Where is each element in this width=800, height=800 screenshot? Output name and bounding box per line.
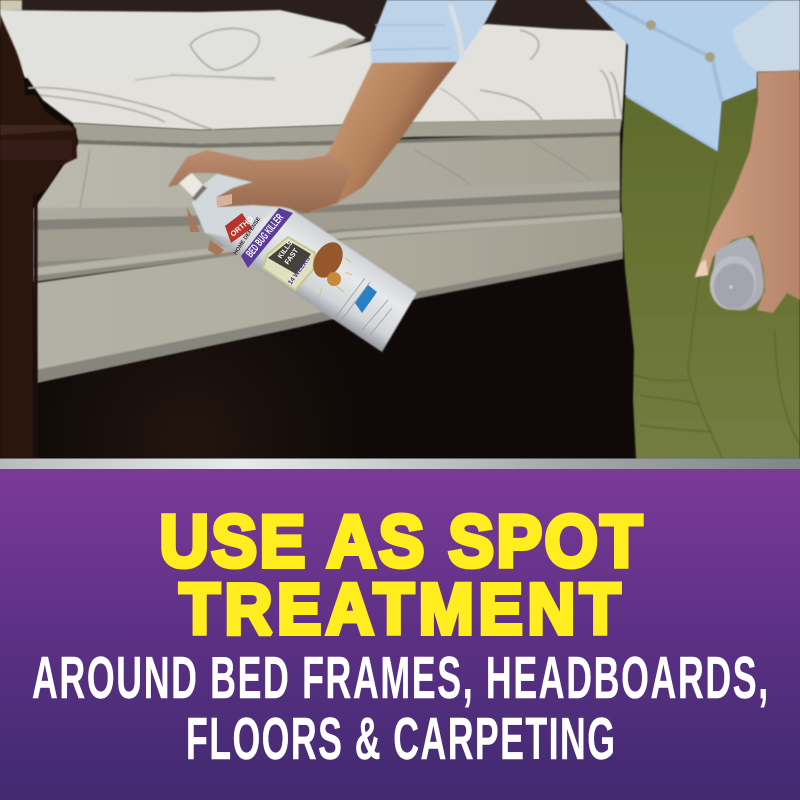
purple band bbox=[241, 208, 293, 268]
person: hand holding can base bbox=[695, 70, 800, 313]
floor shadow bbox=[37, 260, 640, 458]
shirt buttons bbox=[646, 20, 656, 30]
logo bbox=[225, 213, 252, 243]
spray can base bbox=[695, 237, 764, 314]
silver divider band bbox=[0, 458, 800, 469]
person: trousers bbox=[621, 80, 800, 459]
small print bbox=[335, 278, 392, 335]
hand on can bbox=[168, 150, 352, 213]
headboard bbox=[22, 0, 632, 45]
brand line: HOME DEFENSE bbox=[233, 216, 262, 256]
fingers behind can bbox=[187, 207, 224, 256]
photo: bedroom scene bbox=[0, 0, 800, 459]
heading bbox=[160, 501, 642, 649]
person: shirt bbox=[585, 0, 800, 152]
blue coverage tag bbox=[355, 285, 377, 313]
badge bbox=[263, 237, 315, 290]
subheading: FLOORS & CARPETING bbox=[186, 707, 615, 772]
shirt sleeve bbox=[370, 0, 497, 64]
can label: FAST bbox=[284, 247, 301, 266]
can label: 14 WEEKS bbox=[287, 255, 312, 286]
bed post bbox=[0, 14, 77, 458]
can label bbox=[225, 208, 392, 335]
bed: top pillow and quilted mattress bbox=[0, 0, 627, 130]
purple text panel bbox=[0, 469, 800, 800]
bed: mattress side and base bbox=[33, 119, 623, 383]
subheading: AROUND BED FRAMES, HEADBOARDS, bbox=[32, 646, 768, 711]
thumbnail bbox=[217, 194, 232, 207]
can label: KILLS bbox=[277, 239, 295, 260]
heading: TREATMENT bbox=[180, 569, 620, 649]
spray can bbox=[178, 173, 417, 352]
can label: BED BUG KILLER bbox=[244, 212, 286, 260]
forearm bbox=[290, 62, 457, 213]
heading: USE AS SPOT bbox=[160, 501, 642, 583]
subheading bbox=[32, 646, 768, 772]
shirt cuff bbox=[732, 0, 800, 72]
can label: ORTHO bbox=[229, 214, 255, 239]
bed bug illustration bbox=[307, 237, 352, 297]
